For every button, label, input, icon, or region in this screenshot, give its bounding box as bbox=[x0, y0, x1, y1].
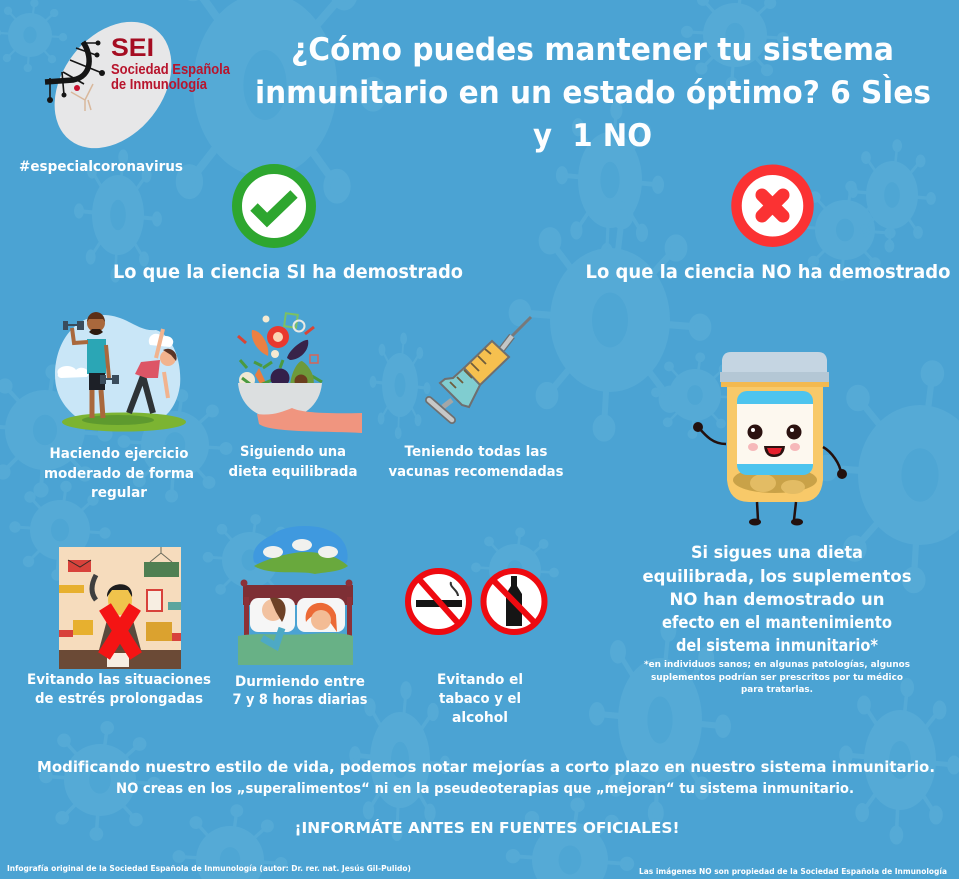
credit: images: Las imágenes NO son propiedad de la Sociedad Española de Inmunología bbox=[639, 867, 947, 876]
title: inmunitario en un estado óptimo? 6 SÌes bbox=[255, 75, 931, 111]
illustration: sleeping couple bbox=[238, 526, 353, 665]
illustration: healthy food bowl bbox=[238, 313, 362, 433]
closing message bbox=[37, 758, 935, 797]
illustration: syringe bbox=[429, 317, 531, 420]
icon: green check bbox=[237, 169, 311, 243]
footnote: supplements: *en individuos sanos; en algunas patologías, algunos bbox=[644, 660, 910, 670]
text: supplements statement: Si sigues una dieta bbox=[691, 543, 863, 563]
caption: exercise bbox=[44, 446, 194, 501]
caption: diet bbox=[228, 444, 358, 480]
credit: author: Infografía original de la Sociedad Española de Inmunología (autor: Dr. rer. nat. Jesús Gil-Pulido) bbox=[7, 864, 411, 873]
caption: sleep: 7 y 8 horas diarias bbox=[232, 692, 368, 708]
illustration: pill bottle character bbox=[693, 352, 847, 526]
title bbox=[255, 32, 931, 154]
caption: vaccines: vacunas recomendadas bbox=[388, 464, 564, 480]
caption: exercise: Haciendo ejercicio bbox=[50, 446, 189, 462]
caption: tobacco and alcohol: tabaco y el bbox=[439, 691, 521, 707]
caption: stress: de estrés prolongadas bbox=[35, 691, 203, 707]
caption: sleep: Durmiendo entre bbox=[235, 674, 365, 690]
title: ¿Cómo puedes mantener tu sistema bbox=[291, 32, 894, 68]
text: supplements statement bbox=[642, 543, 912, 656]
caption: vaccines: Teniendo todas las bbox=[404, 444, 548, 460]
illustration: exercise bbox=[55, 312, 186, 432]
text: supplements statement: efecto en el mantenimiento bbox=[662, 613, 892, 633]
illustration: stressed office worker bbox=[59, 547, 181, 669]
icon: no alcohol bbox=[484, 571, 544, 632]
call to action: ¡INFORMÁTE ANTES EN FUENTES OFICIALES! bbox=[294, 818, 680, 837]
footnote: supplements bbox=[644, 660, 910, 695]
caption: tobacco and alcohol bbox=[437, 672, 523, 726]
caption: sleep bbox=[232, 674, 368, 708]
footnote: supplements: suplementos podrían ser prescritos por tu médico bbox=[651, 672, 903, 683]
logo: Sociedad Española de Inmunología: de Inmunología bbox=[111, 76, 208, 93]
icon: red cross bbox=[736, 170, 808, 242]
closing message: Modificando nuestro estilo de vida, podemos notar mejorías a corto plazo en nuestro sistema inmunitario. bbox=[37, 758, 935, 776]
caption: stress bbox=[27, 672, 211, 707]
hashtag: #especialcoronavirus bbox=[19, 159, 183, 175]
title: y 1 NO bbox=[533, 118, 652, 154]
caption: exercise: moderado de forma bbox=[44, 466, 194, 482]
caption: diet: Siguiendo una bbox=[240, 444, 346, 460]
logo: Sociedad Española de Inmunología bbox=[31, 0, 231, 171]
caption: exercise: regular bbox=[91, 485, 148, 501]
text: supplements statement: del sistema inmunitario* bbox=[676, 636, 878, 656]
caption: vaccines bbox=[388, 444, 564, 480]
text: supplements statement: equilibrada, los suplementos bbox=[642, 567, 912, 587]
logo: Sociedad Española de Inmunología: Sociedad Española bbox=[111, 61, 231, 78]
caption: tobacco and alcohol: alcohol bbox=[452, 710, 508, 726]
logo: Sociedad Española de Inmunología: SEI bbox=[111, 34, 154, 62]
caption: stress: Evitando las situaciones bbox=[27, 672, 211, 688]
caption: tobacco and alcohol: Evitando el bbox=[437, 672, 523, 688]
text: supplements statement: NO han demostrado un bbox=[670, 590, 884, 610]
footnote: supplements: para tratarlas. bbox=[741, 685, 813, 695]
icon: no smoking bbox=[408, 571, 469, 632]
caption: diet: dieta equilibrada bbox=[228, 464, 358, 480]
closing message: NO creas en los „superalimentos“ ni en la pseudeoterapias que „mejoran“ tu sistema inmunitario. bbox=[116, 781, 854, 797]
heading: science yes: Lo que la ciencia SI ha demostrado bbox=[113, 261, 463, 283]
